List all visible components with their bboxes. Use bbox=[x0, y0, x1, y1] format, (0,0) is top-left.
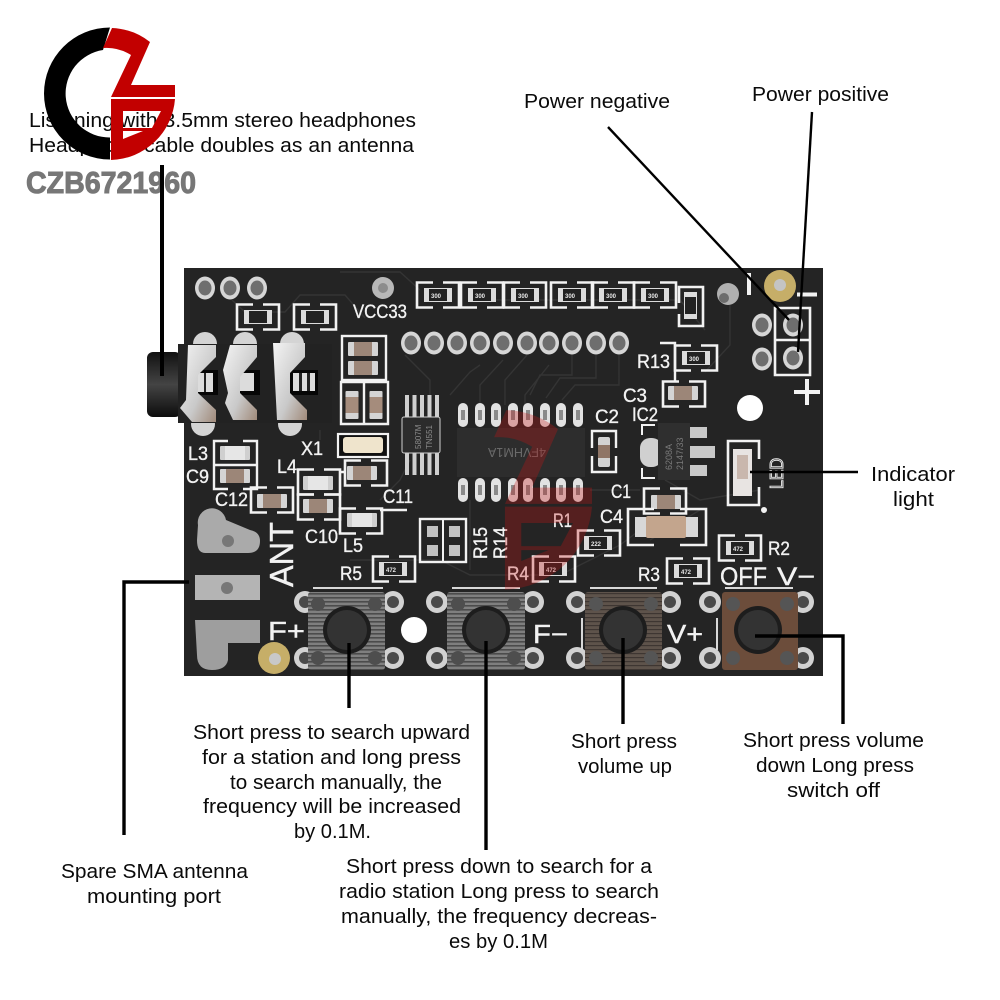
resistor row 300 bbox=[417, 282, 676, 308]
headphone jack caption bbox=[29, 109, 416, 157]
vertical resistor bbox=[679, 287, 703, 326]
SMA pad bbox=[195, 575, 260, 600]
labels R14 R15 bbox=[471, 527, 512, 559]
resistor row 300: 300 bbox=[606, 294, 617, 300]
label: R3: R3 bbox=[638, 565, 660, 586]
leader: indicator light bbox=[750, 471, 858, 473]
caption: V+ button: Short press bbox=[571, 730, 677, 753]
power header bbox=[747, 270, 820, 405]
through holes: top left bbox=[195, 276, 267, 300]
label: X1: X1 bbox=[301, 439, 323, 460]
resistor row 300: 300 bbox=[518, 294, 529, 300]
silk: minus bbox=[797, 292, 817, 296]
button F- bbox=[426, 591, 544, 670]
labels C11 C10 L5: C11 bbox=[383, 487, 413, 508]
caption: F- button: es by 0.1M bbox=[449, 930, 548, 953]
label: C2: C2 bbox=[595, 407, 619, 428]
label: R4: R4 bbox=[507, 564, 529, 585]
logo: red B bbox=[111, 99, 175, 160]
labels R14 R15: R15 bbox=[471, 527, 492, 559]
caption: F+ button: frequency will be increased bbox=[203, 795, 461, 818]
panel: circuit board bbox=[147, 268, 823, 676]
leader: power positive bbox=[798, 112, 812, 352]
label: R5: R5 bbox=[340, 564, 362, 585]
capacitor block bbox=[341, 336, 388, 424]
label: LED: LED bbox=[767, 458, 787, 489]
label: C3: C3 bbox=[623, 386, 647, 407]
small audio IC bbox=[402, 395, 440, 475]
leader: F+ button bbox=[347, 643, 351, 708]
brand logo bbox=[44, 28, 175, 160]
caption: V- button: switch off bbox=[787, 779, 880, 802]
resistor R5 bbox=[373, 556, 415, 582]
label: R1: R1 bbox=[553, 511, 572, 532]
label: C4: C4 bbox=[600, 507, 623, 528]
labels R14 R15: R14 bbox=[491, 527, 512, 559]
resistor R13 bbox=[660, 343, 717, 382]
caption: power positive: Power positive bbox=[752, 83, 889, 106]
resistor R4 bbox=[533, 556, 575, 582]
caption: F- button bbox=[339, 855, 659, 953]
resistor R4: 472 bbox=[546, 568, 557, 574]
crystal bbox=[338, 434, 388, 457]
resistor R3 bbox=[667, 558, 709, 584]
left labels L3 C9 L4 C12 bbox=[186, 444, 297, 511]
copper traces bbox=[232, 272, 760, 575]
caption: power negative: Power negative bbox=[524, 90, 670, 113]
caption: F+ button bbox=[193, 721, 470, 843]
leader: power negative bbox=[608, 127, 789, 320]
resistor R1: 222 bbox=[591, 542, 602, 548]
resistor R5: 472 bbox=[386, 568, 397, 574]
silk: connector outline bbox=[775, 308, 810, 375]
main radio IC bbox=[457, 403, 585, 502]
pad block R14 R15 bbox=[420, 519, 466, 562]
label: F+: F+ bbox=[268, 616, 305, 646]
caption: F+ button: by 0.1M. bbox=[294, 820, 371, 843]
caption: F+ button: to search manually, the bbox=[230, 771, 442, 794]
regulator IC2: 6208A bbox=[664, 444, 674, 470]
capacitor C12 bbox=[251, 488, 293, 512]
indicator LED bbox=[728, 441, 767, 513]
leader: audio jack bbox=[160, 165, 164, 376]
resistor row 300: 300 bbox=[648, 294, 659, 300]
board substrate bbox=[184, 268, 823, 676]
jack body bbox=[178, 344, 332, 423]
label: R13: R13 bbox=[637, 352, 670, 373]
jack solder tabs bbox=[191, 332, 304, 436]
silk: plus bbox=[794, 379, 820, 405]
caption: F- button: manually, the frequency decreas- bbox=[341, 905, 657, 928]
mounting hole: right bbox=[737, 395, 763, 421]
caption: F- button: radio station Long press to search bbox=[339, 880, 659, 903]
gold pad bottom left bbox=[258, 642, 290, 674]
test pad: right bbox=[717, 283, 739, 305]
label: ANT: ANT bbox=[263, 522, 300, 587]
small audio IC: 5807M bbox=[414, 424, 423, 449]
capacitor C2 bbox=[592, 431, 616, 472]
leader: SMA antenna port bbox=[124, 582, 189, 835]
labels C11 C10 L5: L5 bbox=[343, 536, 363, 557]
regulator IC2 bbox=[640, 423, 715, 480]
left labels L3 C9 L4 C12: C9 bbox=[186, 467, 209, 488]
caption: indicator light: light bbox=[893, 488, 934, 511]
leader: V- button bbox=[755, 636, 843, 724]
left labels L3 C9 L4 C12: L3 bbox=[188, 444, 208, 465]
label: IC2: IC2 bbox=[632, 405, 658, 426]
left labels L3 C9 L4 C12: L4 bbox=[277, 457, 297, 478]
caption: SMA antenna port: mounting port bbox=[87, 885, 221, 908]
left labels L3 C9 L4 C12: C12 bbox=[215, 490, 248, 511]
caption: SMA antenna port: Spare SMA antenna bbox=[61, 860, 249, 883]
resistor R3: 472 bbox=[681, 570, 692, 576]
main radio IC: 4FVHM1A bbox=[488, 445, 546, 460]
labels OFF and V-: V− bbox=[777, 563, 815, 591]
label: R2: R2 bbox=[768, 539, 790, 560]
caption: indicator light bbox=[871, 463, 955, 511]
resistor row 300: 300 bbox=[431, 294, 442, 300]
leader: F- button bbox=[484, 641, 488, 850]
button V- bbox=[699, 591, 814, 670]
label: VCC33: VCC33 bbox=[353, 302, 407, 323]
labels C11 C10 L5 bbox=[305, 487, 413, 557]
headphone jack caption: Headphone cable doubles as an antenna bbox=[29, 134, 415, 157]
caption: V+ button bbox=[571, 730, 677, 778]
caption: F- button: Short press down to search for a bbox=[346, 855, 653, 878]
resistor R2 bbox=[719, 536, 761, 560]
button V+ bbox=[566, 591, 681, 670]
ground pad bbox=[195, 620, 260, 670]
leader: V+ button bbox=[621, 638, 625, 724]
gold mounting pad bbox=[764, 270, 796, 302]
label: C1: C1 bbox=[611, 482, 631, 503]
label: F-: F− bbox=[533, 619, 568, 649]
antenna pad bbox=[197, 508, 260, 553]
labels OFF and V-: OFF bbox=[720, 563, 767, 591]
jack clips bbox=[180, 343, 307, 422]
button silk marks bbox=[313, 588, 793, 650]
caption: V+ button: volume up bbox=[578, 755, 672, 778]
resistor R13: 300 bbox=[689, 357, 700, 363]
inductor L3 and capacitor C9 bbox=[214, 441, 257, 489]
resistor R1 bbox=[578, 530, 620, 556]
mounting hole: bottom bbox=[401, 617, 427, 643]
logo: red Z bbox=[103, 28, 175, 97]
capacitor C3 bbox=[663, 382, 705, 406]
audio jack bbox=[147, 332, 332, 436]
resistor R2: 472 bbox=[733, 547, 744, 553]
capacitor C1 bbox=[644, 488, 686, 514]
caption: V- button: down Long press bbox=[756, 754, 914, 777]
header through holes bbox=[401, 332, 629, 354]
test pad: VCC33 bbox=[372, 277, 394, 299]
small audio IC: TN551 bbox=[425, 424, 434, 449]
regulator IC2: 2147/33 bbox=[675, 437, 685, 470]
caption: indicator light: Indicator bbox=[871, 463, 955, 486]
RF component cluster bbox=[298, 460, 407, 534]
resistor row 300: 300 bbox=[565, 294, 576, 300]
button F+ bbox=[294, 591, 404, 670]
top SMD pair bbox=[237, 304, 336, 330]
jack barrel bbox=[147, 352, 181, 417]
headphone jack caption: Listening with 3.5mm stereo headphones bbox=[29, 109, 416, 132]
label: V+: V+ bbox=[667, 619, 703, 649]
caption: SMA antenna port bbox=[61, 860, 249, 908]
caption: F+ button: for a station and long press bbox=[202, 746, 461, 769]
logo: black C ring bbox=[44, 28, 110, 160]
resistor row 300: 300 bbox=[475, 294, 486, 300]
silk: pin 1 mark bbox=[747, 273, 751, 295]
caption: F+ button: Short press to search upward bbox=[193, 721, 470, 744]
caption: V- button bbox=[743, 729, 924, 802]
brand name: CZB6721960 bbox=[26, 165, 196, 200]
labels OFF and V- bbox=[720, 563, 815, 591]
caption: V- button: Short press volume bbox=[743, 729, 924, 752]
watermark logo on board bbox=[494, 410, 592, 590]
capacitor C4 bbox=[628, 509, 706, 545]
labels C11 C10 L5: C10 bbox=[305, 527, 338, 548]
